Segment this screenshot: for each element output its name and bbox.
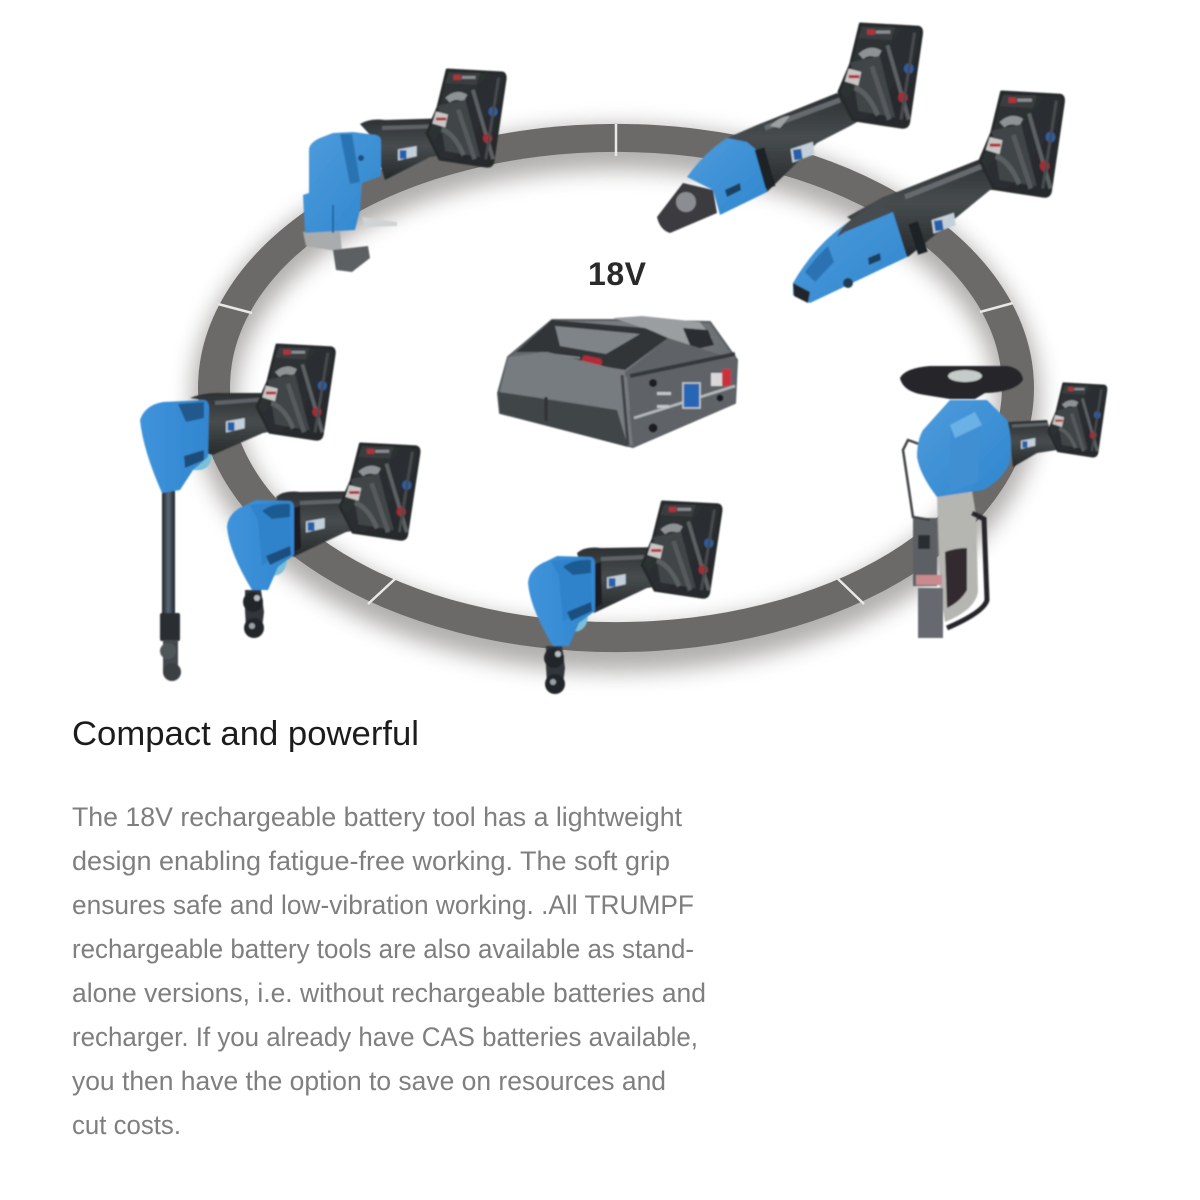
tool: top-left profile nibbler — [303, 70, 505, 272]
body paragraph — [72, 802, 706, 1140]
body paragraph: alone versions, i.e. without rechargeable batteries and — [72, 978, 706, 1008]
tool: nibbler, bottom centre — [528, 502, 721, 694]
body paragraph: design enabling fatigue-free working. The soft grip — [72, 846, 670, 876]
body paragraph: ensures safe and low-vibration working. .All TRUMPF — [72, 890, 694, 920]
body paragraph: recharger. If you already have CAS batteries available, — [72, 1022, 698, 1052]
charging ring — [198, 124, 1034, 652]
tool: straight shear — [657, 24, 922, 233]
ring shadow — [214, 148, 1018, 650]
heading: Compact and powerful — [72, 715, 419, 753]
label: 18V: 18V — [588, 256, 647, 292]
body paragraph: The 18V rechargeable battery tool has a lightweight — [72, 802, 682, 832]
tool: C-frame notcher — [900, 366, 1106, 638]
tool: nibbler, front left — [227, 444, 419, 638]
tool: slitting shear — [793, 92, 1063, 303]
body paragraph: cut costs. — [72, 1110, 181, 1140]
tool: long-reach nibbler — [140, 345, 334, 681]
body paragraph: rechargeable battery tools are also available as stand- — [72, 934, 694, 964]
central 18V battery pack — [498, 316, 737, 447]
body paragraph: you then have the option to save on resources and — [72, 1066, 666, 1096]
